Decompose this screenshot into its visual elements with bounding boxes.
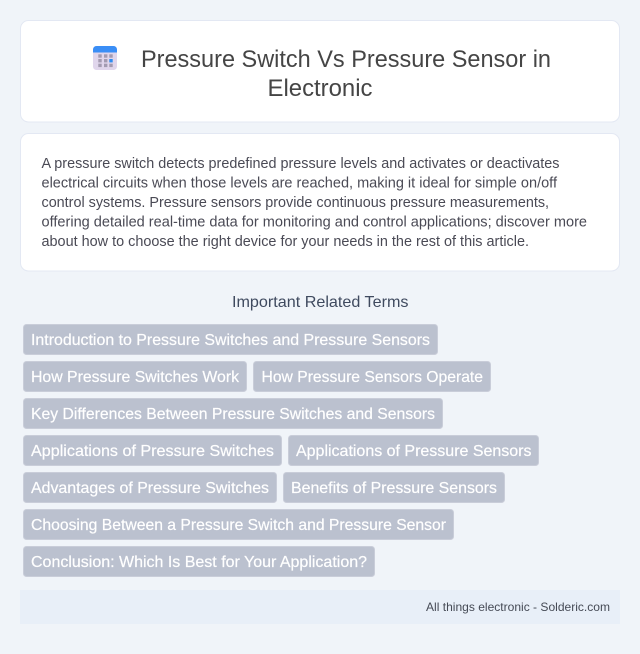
tag: applications of switches (24, 436, 282, 466)
tag: introduction (24, 324, 438, 354)
title: Pressure Switch Vs Pressure Sensor in (141, 46, 551, 73)
tag: conclusion: Conclusion: Which Is Best for Your Application? (31, 554, 367, 571)
text block: summary: electrical circuits when those levels are reached, making it ideal for simple on/off (42, 175, 558, 191)
tag: choosing: Choosing Between a Pressure Switch and Pressure Sensor (31, 517, 447, 534)
footer (20, 590, 620, 624)
tag: applications of switches: Applications of Pressure Switches (31, 443, 274, 460)
tag: advantages of switches (24, 472, 276, 502)
tag: choosing (24, 510, 454, 540)
heading: important related terms: Important Related Terms (232, 294, 408, 311)
tag: how sensors operate (254, 362, 490, 392)
text block: summary (42, 156, 587, 250)
panel: title card (20, 20, 620, 122)
tag: how switches work: How Pressure Switches Work (31, 369, 240, 386)
panel: summary text card (20, 134, 620, 271)
tag: how sensors operate: How Pressure Sensors Operate (262, 369, 483, 386)
tag list (24, 324, 538, 576)
text block: summary: A pressure switch detects predefined pressure levels and activates or deactivates (42, 156, 560, 172)
tag: benefits of sensors: Benefits of Pressure Sensors (291, 480, 497, 497)
tag: how switches work (24, 362, 246, 392)
tag: applications of sensors: Applications of Pressure Sensors (296, 443, 532, 460)
text block: summary: offering detailed real-time data for monitoring and control applications; discover more (42, 214, 587, 230)
tag: key differences: Key Differences Between Pressure Switches and Sensors (31, 406, 435, 423)
icon: calendar (93, 46, 117, 70)
tag: introduction: Introduction to Pressure Switches and Pressure Sensors (31, 332, 430, 349)
title: Electronic (268, 75, 372, 102)
text block: summary: about how to choose the right device for your needs in the rest of this article. (42, 234, 529, 250)
tag: applications of sensors (288, 436, 538, 466)
footer: All things electronic - Solderic.com (426, 600, 610, 614)
text block: summary: control systems. Pressure sensors provide continuous pressure measurements, (42, 195, 549, 211)
tag: benefits of sensors (284, 472, 504, 502)
tag: conclusion (24, 546, 374, 576)
tag: advantages of switches: Advantages of Pressure Switches (31, 480, 269, 497)
title (141, 46, 551, 102)
tag: key differences (24, 398, 442, 428)
